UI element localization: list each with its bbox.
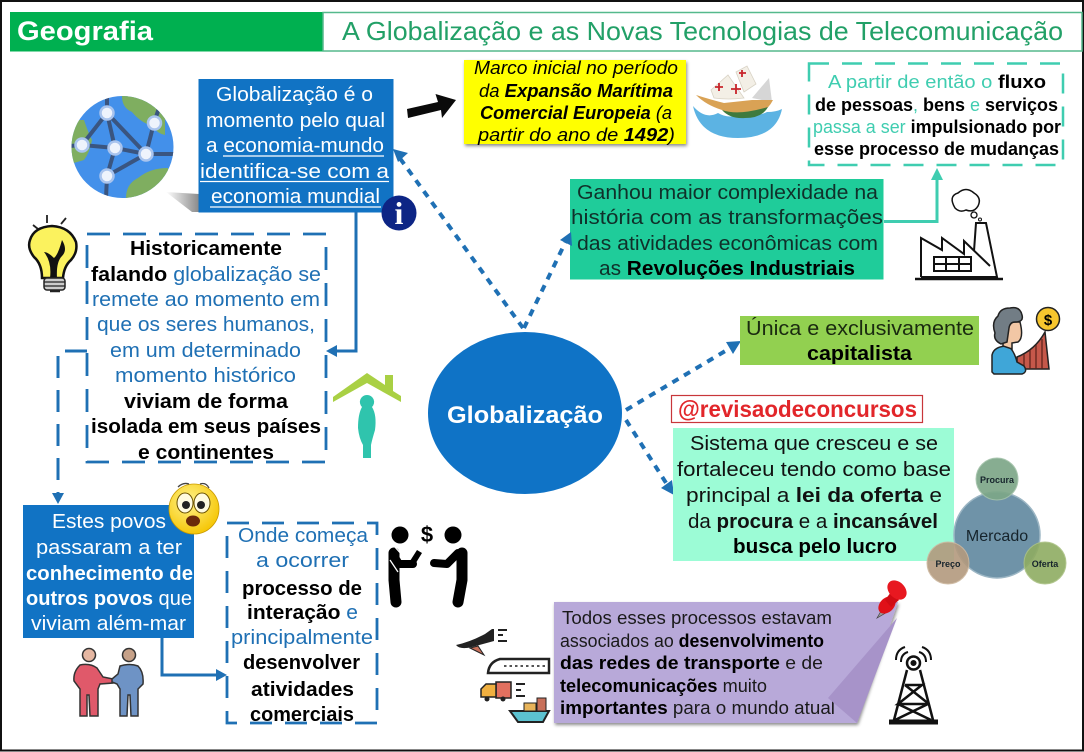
plane <box>456 629 507 655</box>
icon: connected globe <box>70 96 199 212</box>
panel: Industrial Revolutions <box>570 179 884 280</box>
train <box>488 659 549 673</box>
panel: definition of globalization: identifica-se com a <box>200 161 390 183</box>
panel: flow of people, goods and services <box>809 64 1063 165</box>
panel: where interaction begins: interação e <box>247 602 358 624</box>
arrow: dotted to industrial revolutions <box>524 232 572 328</box>
panel: historically speaking <box>87 234 326 464</box>
header left band: subject: Geografia <box>17 16 154 46</box>
panel: Industrial Revolutions: história com as transformações <box>571 207 883 229</box>
icon: light bulb <box>29 215 76 291</box>
panel: historically speaking: momento histórico <box>115 365 296 387</box>
panel: definition of globalization: momento pelo qual <box>206 110 385 132</box>
diagram: market: Mercado <box>966 528 1028 545</box>
header title band: A Globalização e as Novas Tecnologias de Telecomunicação <box>342 16 1063 46</box>
panel: starting point: da Expansão Marítima <box>479 81 673 101</box>
icon: people exchanging money: $ <box>421 522 433 547</box>
panel: historically speaking: remete ao momento em <box>92 289 320 311</box>
panel: definition of globalization <box>198 79 394 212</box>
panel: where interaction begins: atividades <box>251 679 354 701</box>
icon: information: i <box>395 195 404 231</box>
icon: person with growth chart <box>992 308 1060 374</box>
panel: historically speaking: que os seres humanos, <box>97 314 315 336</box>
panel: market system: fortaleceu tendo como base <box>677 459 951 481</box>
panel: starting point: Comercial Europeia (a <box>480 103 672 123</box>
diagram: market <box>927 458 1066 584</box>
icon: factory <box>915 190 1003 279</box>
panel: transport and telecommunication networks: telecomunicações muito <box>560 676 767 696</box>
central node: Globalização <box>428 332 622 494</box>
panel: flow of people, goods and services: esse processo de mudanças <box>814 139 1059 159</box>
arrow: dotted to market system <box>626 420 674 495</box>
panel: where interaction begins: a ocorrer <box>256 550 349 572</box>
arrow: dotted to capitalist <box>626 341 741 410</box>
panel: transport and telecommunication networks: Todos esses processos estavam <box>562 608 832 628</box>
arrow: black to starting point <box>407 94 456 118</box>
icon: surprised emoji <box>169 483 219 534</box>
arrow: dashed to peoples panel <box>52 351 87 504</box>
panel: transport and telecommunication networks <box>554 602 898 723</box>
icon: red push pin <box>875 577 910 618</box>
panel: these peoples <box>23 505 194 638</box>
panel: where interaction begins: Onde começa <box>238 525 369 547</box>
panel: transport and telecommunication networks: associados ao desenvolvimento <box>560 631 824 651</box>
icon: isolated person under roof <box>333 373 401 458</box>
panel: transport and telecommunication networks: importantes para o mundo atual <box>560 698 835 718</box>
panel: flow of people, goods and services: A partir de então o fluxo <box>828 72 1046 92</box>
panel: Industrial Revolutions: das atividades econômicas com <box>577 233 878 255</box>
panel: starting point: Marco inicial no período <box>474 58 678 78</box>
diagram: market: Preço <box>935 559 961 569</box>
panel: flow of people, goods and services: de pessoas, bens e serviços <box>815 95 1058 115</box>
arrow: peoples to trade <box>162 638 227 681</box>
icon: telecom tower <box>889 647 938 722</box>
truck <box>481 682 525 702</box>
panel: where interaction begins <box>227 523 377 726</box>
header left band: subject <box>10 12 323 52</box>
arrow: dotted to definition <box>393 149 523 328</box>
handle: @revisaodeconcursos: @revisaodeconcursos <box>678 396 917 422</box>
diagram: market: Procura <box>980 475 1015 485</box>
panel: these peoples: passaram a ter <box>36 537 182 559</box>
panel: market system: busca pelo lucro <box>733 536 897 558</box>
panel: flow of people, goods and services: passa a ser impulsionado por <box>813 117 1061 137</box>
panel: definition of globalization: Globalização é o <box>216 84 373 106</box>
panel: these peoples: outros povos que <box>26 588 192 610</box>
panel: historically speaking: falando globalização se <box>91 264 321 286</box>
central node: Globalização: Globalização <box>447 402 603 429</box>
panel: these peoples: viviam além-mar <box>31 613 186 635</box>
icon: caravel ship <box>693 66 782 138</box>
panel: market system <box>673 428 954 561</box>
panel: transport and telecommunication networks: das redes de transporte e de <box>560 653 823 673</box>
panel: where interaction begins: comerciais <box>250 704 354 726</box>
icon: information <box>382 195 416 231</box>
panel: these peoples: Estes povos <box>52 511 166 533</box>
icon: person with growth chart: $ <box>1044 312 1053 329</box>
panel: only capitalist: capitalista <box>807 343 913 365</box>
panel: definition of globalization: economia mundial <box>211 186 380 208</box>
panel: Industrial Revolutions: as Revoluções Industriais <box>599 258 855 280</box>
panel: market system: da procura e a incansável <box>688 511 938 533</box>
panel: historically speaking: Historicamente <box>130 238 282 260</box>
arrow: definition to historically <box>326 212 356 357</box>
panel: market system: principal a lei da oferta e <box>686 485 942 507</box>
panel: these peoples: conhecimento de <box>26 563 193 585</box>
icon: people exchanging money <box>390 522 462 602</box>
panel: market system: Sistema que cresceu e se <box>690 433 938 455</box>
panel: where interaction begins: processo de <box>242 578 362 600</box>
cargo ship <box>510 698 549 722</box>
panel: historically speaking: em um determinado <box>110 340 301 362</box>
panel: historically speaking: e continentes <box>138 442 274 464</box>
panel: historically speaking: viviam de forma <box>124 391 289 413</box>
panel: where interaction begins: desenvolver <box>243 652 360 674</box>
panel: starting point: partir do ano de 1492) <box>477 125 675 145</box>
panel: starting point <box>464 58 686 145</box>
panel: Industrial Revolutions: Ganhou maior complexidade na <box>577 182 879 204</box>
panel: definition of globalization: a economia-mundo <box>206 135 384 157</box>
panel: only capitalist: Única e exclusivamente <box>746 317 974 340</box>
header <box>10 12 1082 52</box>
panel: where interaction begins: principalmente <box>231 627 373 649</box>
icon: two people handshake <box>74 648 143 716</box>
diagram: market: Oferta <box>1032 559 1059 569</box>
icon: transport modes <box>456 629 549 722</box>
panel: only capitalist <box>740 316 979 365</box>
panel: historically speaking: isolada em seus países <box>91 416 321 438</box>
arrow: industrial revolutions to flow <box>884 168 943 222</box>
